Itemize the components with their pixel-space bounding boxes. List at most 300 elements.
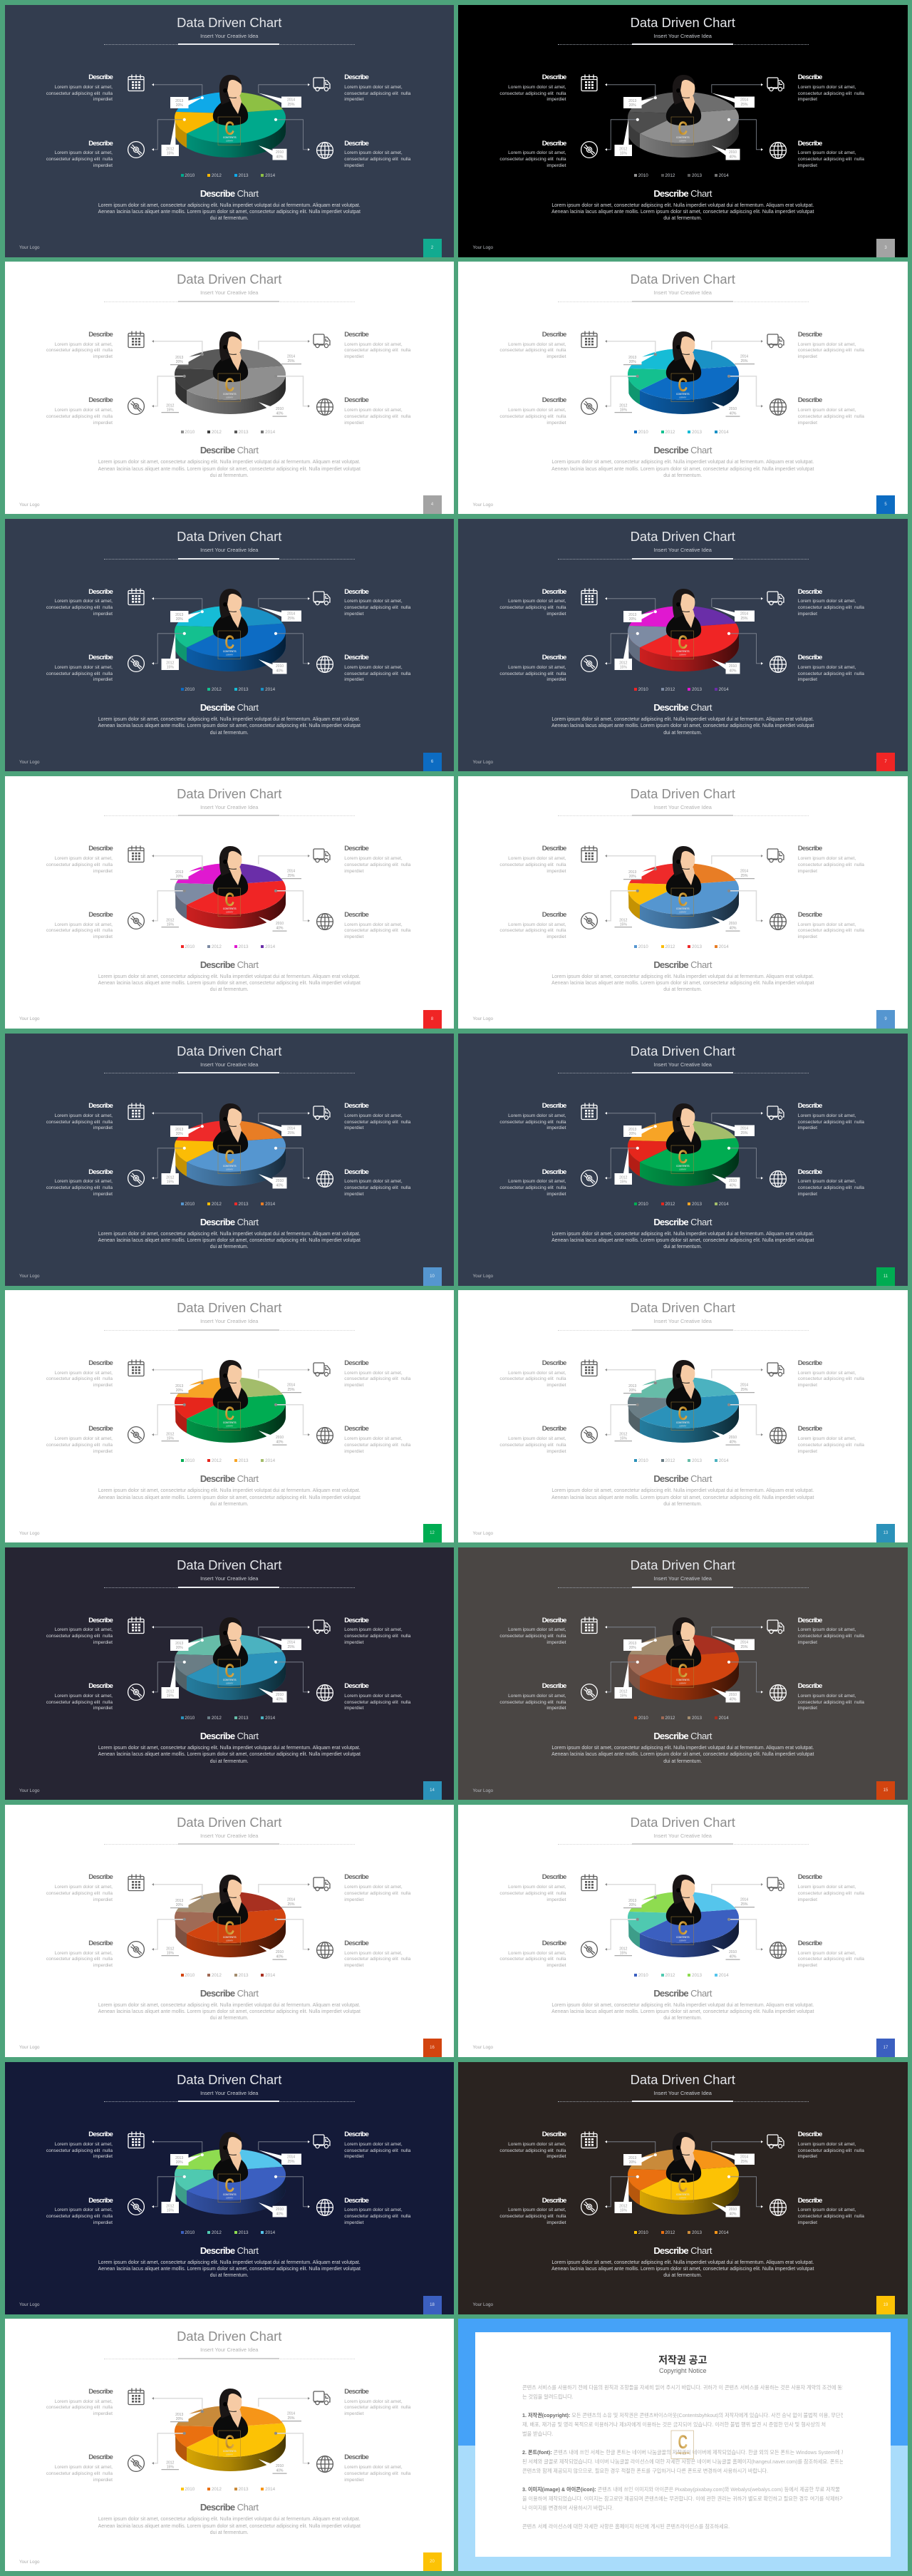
callout: bottom right: [344, 1682, 426, 1712]
chart: 3d pie with presenter: CONTENTS: [222, 650, 237, 653]
legend: 2010: [185, 1973, 195, 1978]
callout: top left: Describe: [88, 2388, 113, 2396]
callout: bottom left: Describe: [542, 396, 566, 404]
icon: truck: [767, 1619, 784, 1636]
chart: 3d pie with presenter: C: [678, 631, 688, 653]
chart: 3d pie with presenter: 2010: [729, 1693, 737, 1697]
chart: 3d pie with presenter: 25%: [287, 359, 295, 364]
chart: 3d pie with presenter: 20%: [175, 617, 183, 622]
icon: truck: [313, 1619, 330, 1636]
icon: disc: [581, 1426, 598, 1443]
callout: bottom left: Lorem ipsum dolor sit amet, consectetur adipiscing elit nulla imperdiet: [46, 2207, 113, 2225]
icon: truck: [767, 590, 784, 607]
icon: truck: [767, 77, 784, 91]
chart: 3d pie with presenter: 20%: [175, 103, 183, 108]
description: Lorem ipsum dolor sit amet, consectetur adipiscing elit. Nulla imperdiet volutpat dui at fermentum. Aliquam erat volutpat.: [98, 1746, 361, 1751]
callout: top left: Lorem ipsum dolor sit amet, consectetur adipiscing elit nulla imperdiet: [499, 1371, 566, 1388]
callout: top left: [499, 331, 566, 359]
legend: 2014: [265, 1716, 275, 1721]
callout: top right: Lorem ipsum dolor sit amet, consectetur adipiscing elit nulla imperdiet: [344, 1371, 410, 1388]
callout: top left: Describe: [542, 1102, 566, 1110]
chart: 3d pie with presenter: 2010: [729, 407, 737, 411]
description: dui at fermentum.: [210, 473, 249, 478]
chart: 3d pie with presenter: LIBRARY: [679, 1426, 687, 1428]
callout: top right: Describe: [798, 73, 822, 81]
notice body text: 을 이용하여 제작되었습니다. 이미지는 참고로만 제공되며 콘텐츠에는 무관합니다. 이에 관한 권리는 귀하가 별도로 확인하고 필요한 경우 여기를 삭제하거: [522, 2496, 843, 2502]
page number: 11: [884, 1274, 888, 1279]
callout: top right: [798, 1102, 880, 1132]
callout: top right: Describe: [344, 2131, 368, 2138]
legend: 2014: [265, 1973, 275, 1978]
chart: 3d pie with presenter: [151, 2386, 311, 2475]
title: Data Driven Chart: [631, 2071, 735, 2087]
icon: globe: [770, 656, 787, 673]
description: Describe Chart: [200, 188, 259, 198]
legend: 2014: [265, 944, 275, 949]
callout: top right: Describe: [344, 1359, 368, 1367]
callout: bottom left: [31, 1939, 113, 1969]
callout: top left: [31, 1873, 113, 1904]
description: Aenean lacinia lacus aliquet ante mollis. Lorem ipsum dolor sit amet, consectetur adipiscing elit. Nulla imperdiet volutpat: [551, 467, 814, 472]
legend: 2012: [665, 430, 675, 435]
chart: 3d pie with presenter: CONTENTS: [222, 907, 237, 910]
callout: top right: Describe: [798, 1873, 822, 1881]
chart: 3d pie with presenter: 2012: [166, 1947, 174, 1951]
description: Describe Chart: [200, 1988, 259, 1999]
callout: top right: Lorem ipsum dolor sit amet, consectetur adipiscing elit nulla imperdiet: [798, 342, 864, 359]
callout: top left: Describe: [542, 331, 566, 339]
callout: bottom left: [46, 140, 113, 168]
callout: top right: [344, 2388, 426, 2418]
description: dui at fermentum.: [663, 2273, 702, 2278]
chart: 3d pie with presenter: 2013: [628, 1899, 636, 1903]
description: dui at fermentum.: [663, 473, 702, 478]
callout: bottom right: Describe: [798, 1425, 822, 1433]
callout: bottom left: Lorem ipsum dolor sit amet, consectetur adipiscing elit nulla imperdiet: [499, 2207, 566, 2225]
description: Aenean lacinia lacus aliquet ante mollis. Lorem ipsum dolor sit amet, consectetur adipiscing elit. Nulla imperdiet volutpat: [551, 981, 814, 986]
chart: 3d pie with presenter: 25%: [740, 103, 748, 107]
chart: 3d pie with presenter: 20%: [629, 2160, 636, 2165]
chart: 3d pie with presenter: 2010: [729, 150, 737, 154]
icon: disc: [581, 1684, 598, 1701]
chart: 3d pie with presenter: 2010: [275, 1178, 284, 1183]
logo text: Your Logo: [473, 1788, 493, 1793]
callout: top left: Lorem ipsum dolor sit amet, consectetur adipiscing elit nulla imperdiet: [499, 1885, 566, 1902]
chart: 3d pie with presenter: 40%: [729, 1441, 737, 1445]
chart: 3d pie with presenter: 2013: [628, 2155, 636, 2160]
callout: top right: Describe: [798, 845, 822, 852]
chart: 3d pie with presenter: 2013: [628, 613, 636, 617]
chart: 3d pie with presenter: 2012: [166, 1175, 174, 1180]
chart: 3d pie with presenter: 2012: [166, 661, 174, 665]
subtitle: Insert Your Creative Idea: [200, 2090, 258, 2096]
callout: bottom left: Lorem ipsum dolor sit amet, consectetur adipiscing elit nulla imperdiet: [499, 1694, 566, 1711]
page number: 4: [431, 503, 433, 507]
subheading: Copyright Notice: [659, 2367, 707, 2374]
callout: top right: Lorem ipsum dolor sit amet, consectetur adipiscing elit nulla imperdiet: [798, 1627, 864, 1645]
page number: [876, 1267, 895, 1286]
description: [458, 1989, 908, 2022]
slide 9: white sky blue: [458, 776, 908, 1029]
callout: top right: [798, 1359, 880, 1389]
callout: bottom left: [484, 1425, 566, 1456]
icon: truck: [313, 77, 331, 91]
description: Aenean lacinia lacus aliquet ante mollis. Lorem ipsum dolor sit amet, consectetur adipiscing elit. Nulla imperdiet volutpat: [98, 2009, 361, 2014]
callout: top right: Lorem ipsum dolor sit amet, consectetur adipiscing elit nulla imperdiet: [344, 342, 410, 359]
callout: bottom right: [798, 140, 864, 168]
notice body text: 는 것임을 알려드립니다.: [522, 2394, 574, 2400]
callout: top left: Describe: [88, 587, 113, 596]
callout: bottom left: [484, 1168, 566, 1198]
title: Data Driven Chart: [177, 1044, 281, 1058]
description: [4, 703, 454, 736]
chart: 3d pie with presenter: CONTENTS: [222, 1165, 237, 1168]
callout: bottom left: Lorem ipsum dolor sit amet, consectetur adipiscing elit nulla imperdiet: [46, 1951, 113, 1968]
description: Aenean lacinia lacus aliquet ante mollis. Lorem ipsum dolor sit amet, consectetur adipiscing elit. Nulla imperdiet volutpat: [98, 2524, 361, 2529]
callout: top left: Lorem ipsum dolor sit amet, consectetur adipiscing elit nulla imperdiet: [499, 1113, 566, 1130]
notice body text: 콘텐츠와 함께 제공되지 않으므로, 필요한 경우 적절한 폰트를 구입하거나 다른 폰트로 변경하여 사용하시기 바랍니다.: [522, 2468, 768, 2474]
callout: bottom right: Describe: [798, 2197, 822, 2204]
callout: bottom right: Describe: [798, 1682, 822, 1690]
legend: 2010: [638, 687, 648, 692]
legend: 2010: [638, 944, 648, 949]
page number: [423, 2039, 442, 2057]
callout: top right: Lorem ipsum dolor sit amet, consectetur adipiscing elit nulla imperdiet: [344, 85, 410, 102]
icon: truck: [313, 2390, 330, 2407]
chart: 3d pie with presenter: LIBRARY: [226, 397, 233, 399]
legend: 2014: [719, 1716, 729, 1721]
callout: top left: Lorem ipsum dolor sit amet, consectetur adipiscing elit nulla imperdiet: [499, 2142, 566, 2159]
slide 18: midnight indigo: [4, 2061, 454, 2314]
chart: 3d pie with presenter: 25%: [740, 1388, 748, 1392]
page number: [876, 238, 895, 257]
legend: 2014: [265, 430, 275, 435]
callout: top left: [31, 1359, 113, 1389]
callout: top left: [484, 1359, 566, 1389]
description: Describe Chart: [653, 2245, 712, 2255]
page number: 17: [884, 2046, 888, 2050]
description: Lorem ipsum dolor sit amet, consectetur adipiscing elit. Nulla imperdiet volutpat dui at fermentum. Aliquam erat volutpat.: [551, 460, 814, 465]
logo text: Your Logo: [473, 1016, 493, 1021]
chart: 3d pie with presenter: C: [224, 117, 234, 138]
chart: 3d pie with presenter: CONTENTS: [222, 135, 237, 138]
chart: 3d pie with presenter: LIBRARY: [226, 654, 233, 656]
icon: disc: [127, 2455, 144, 2472]
callout: bottom right: [344, 396, 410, 426]
callout: top left: Describe: [542, 845, 566, 852]
legend: [181, 430, 275, 435]
chart: 3d pie with presenter: [604, 587, 765, 676]
chart: 3d pie with presenter: 2013: [175, 870, 183, 875]
notice body text: 콘텐츠 서비스를 사용하기 전에 다음의 원칙과 조항들을 자세히 읽어 주시기 바랍니다. 귀하가 이 콘텐츠 서비스를 사용하는 것은 사용자 계약의 조건에 동의하: [522, 2385, 843, 2391]
callout: top right: [344, 587, 426, 618]
chart: 3d pie with presenter: 2013: [628, 1127, 636, 1131]
chart: 3d pie with presenter: C: [224, 888, 234, 910]
chart: 3d pie with presenter: 2013: [175, 2413, 183, 2417]
chart: 3d pie with presenter: 2014: [286, 355, 295, 359]
description: Aenean lacinia lacus aliquet ante mollis. Lorem ipsum dolor sit amet, consectetur adipiscing elit. Nulla imperdiet volutpat: [98, 210, 361, 215]
callout: bottom left: Lorem ipsum dolor sit amet, consectetur adipiscing elit nulla imperdiet: [499, 1436, 566, 1454]
callout: top left: [46, 331, 113, 359]
logo text: Your Logo: [19, 2045, 39, 2050]
title: Data Driven Chart: [177, 2071, 281, 2087]
callout: bottom left: [484, 2197, 566, 2227]
subtitle: Insert Your Creative Idea: [200, 33, 258, 38]
description: Aenean lacinia lacus aliquet ante mollis. Lorem ipsum dolor sit amet, consectetur adipiscing elit. Nulla imperdiet volutpat: [551, 723, 814, 728]
callout: bottom right: Describe: [798, 396, 822, 404]
callout: bottom right: Lorem ipsum dolor sit amet, consectetur adipiscing elit nulla imperdiet: [798, 150, 864, 168]
chart: 3d pie with presenter: 25%: [287, 874, 295, 878]
legend: 2014: [719, 944, 729, 949]
chart: 3d pie with presenter: 2014: [286, 2155, 295, 2159]
chart: 3d pie with presenter: 2014: [740, 1384, 748, 1388]
chart: 3d pie with presenter: 15%: [166, 1694, 174, 1698]
logo: C badge watermark: CONTENTS: [676, 2452, 690, 2455]
page number: 5: [884, 503, 887, 507]
slide 15: warm grey rust: [458, 1547, 908, 1800]
chart: 3d pie with presenter: 2014: [740, 2155, 748, 2159]
chart: 3d pie with presenter: 25%: [740, 1645, 748, 1649]
description: Describe Chart: [653, 959, 712, 970]
chart: 3d pie with presenter: 2014: [740, 98, 748, 102]
callout: bottom right: [798, 911, 880, 941]
legend: [181, 1202, 288, 1207]
legend: 2014: [719, 2230, 729, 2235]
callout: top left: Lorem ipsum dolor sit amet, consectetur adipiscing elit nulla imperdiet: [46, 1371, 113, 1388]
callout: top left: [31, 1617, 113, 1647]
chart: 3d pie with presenter: CONTENTS: [676, 1936, 690, 1939]
legend: 2010: [638, 1973, 648, 1978]
chart: 3d pie with presenter: 2013: [175, 356, 183, 360]
callout: top right: Lorem ipsum dolor sit amet, consectetur adipiscing elit nulla imperdiet: [798, 2142, 864, 2159]
title: Data Driven Chart: [631, 786, 735, 801]
chart: 3d pie with presenter: 2012: [619, 1175, 628, 1180]
callout: bottom left: Describe: [542, 1939, 566, 1947]
chart: 3d pie with presenter: 2010: [275, 922, 284, 926]
description: [458, 1474, 908, 1508]
legend: 2014: [265, 1458, 275, 1463]
callout: top right: Describe: [798, 1102, 822, 1110]
chart: 3d pie with presenter: 20%: [629, 1389, 636, 1393]
chart: 3d pie with presenter: CONTENTS: [222, 1936, 237, 1939]
callout: top left: [484, 1617, 566, 1647]
chart: 3d pie with presenter: 40%: [729, 926, 737, 930]
chart: 3d pie with presenter: 2010: [275, 1693, 284, 1697]
logo text: Your Logo: [473, 760, 493, 764]
callout: bottom right: Lorem ipsum dolor sit amet, consectetur adipiscing elit nulla imperdiet: [344, 1436, 410, 1454]
heading: copyright notice: 저작권 공고: [658, 2354, 707, 2366]
notice body text: 나 이미지를 변경하여 사용하시기 바랍니다.: [522, 2505, 613, 2511]
description: Describe Chart: [653, 188, 712, 198]
chart: 3d pie with presenter: LIBRARY: [679, 2197, 687, 2199]
callout: top left: Lorem ipsum dolor sit amet, consectetur adipiscing elit nulla imperdiet: [46, 2142, 113, 2159]
callout: top right: Lorem ipsum dolor sit amet, consectetur adipiscing elit nulla imperdiet: [344, 1627, 410, 1645]
callout: top right: [344, 73, 410, 102]
callout: top right: [344, 2131, 426, 2160]
chart: 3d pie with presenter: [151, 587, 311, 676]
callout: top right: [344, 1617, 426, 1647]
callout: top left: [484, 1873, 566, 1904]
callout: bottom left: [31, 2453, 113, 2484]
description: [98, 188, 361, 221]
callout: top right: Lorem ipsum dolor sit amet, consectetur adipiscing elit nulla imperdiet: [344, 1113, 410, 1130]
chart: 3d pie with presenter: CONTENTS: [222, 1679, 237, 1681]
chart: 3d pie with presenter: 25%: [740, 359, 748, 364]
description: Describe Chart: [200, 1473, 259, 1484]
icon: disc: [581, 1169, 598, 1186]
chart: 3d pie with presenter: C: [678, 2174, 688, 2195]
callout: top right: Lorem ipsum dolor sit amet, consectetur adipiscing elit nulla imperdiet: [344, 856, 410, 874]
callout: bottom right: [344, 654, 426, 684]
legend: 2014: [265, 2487, 275, 2492]
icon: truck: [767, 1876, 784, 1893]
chart: 3d pie with presenter: 15%: [620, 922, 627, 927]
description: dui at fermentum.: [210, 2016, 249, 2021]
page number: [876, 1524, 895, 1542]
description: Describe Chart: [653, 1216, 712, 1227]
chart: 3d pie with presenter: 2014: [286, 98, 295, 102]
page number: 2: [431, 245, 433, 249]
callout: top left: [31, 1102, 113, 1132]
chart: 3d pie with presenter: 25%: [740, 1130, 748, 1135]
callout: bottom right: Lorem ipsum dolor sit amet, consectetur adipiscing elit nulla imperdiet: [344, 1694, 410, 1711]
logo text: Your Logo: [473, 2302, 493, 2307]
chart: 3d pie with presenter: LIBRARY: [679, 140, 687, 142]
icon: truck: [767, 1105, 784, 1122]
description: Aenean lacinia lacus aliquet ante mollis. Lorem ipsum dolor sit amet, consectetur adipiscing elit. Nulla imperdiet volutpat: [551, 2267, 814, 2272]
callout: top right: Describe: [798, 2131, 822, 2138]
chart: 3d pie with presenter: 40%: [276, 1697, 284, 1701]
description: dui at fermentum.: [210, 2530, 249, 2535]
subtitle: Insert Your Creative Idea: [654, 804, 712, 810]
chart: 3d pie with presenter: 40%: [729, 669, 737, 673]
chart: 3d pie with presenter: LIBRARY: [679, 1939, 687, 1942]
callout: top right: Lorem ipsum dolor sit amet, consectetur adipiscing elit nulla imperdiet: [344, 2142, 410, 2159]
description: [458, 960, 908, 994]
legend: 2013: [692, 172, 702, 178]
chart: 3d pie with presenter: LIBRARY: [226, 2454, 233, 2456]
chart: 3d pie with presenter: C: [678, 1659, 688, 1681]
page number: [423, 1781, 442, 1800]
chart: 3d pie with presenter: [151, 2130, 311, 2218]
chart: 3d pie with presenter: 2012: [166, 918, 174, 922]
chart: 3d pie with presenter: 40%: [729, 2212, 737, 2216]
legend: [181, 1716, 288, 1721]
callout: bottom left: [484, 911, 566, 941]
chart: 3d pie with presenter: CONTENTS: [676, 135, 690, 138]
title: Data Driven Chart: [631, 1044, 735, 1058]
legend: 2014: [265, 172, 275, 178]
legend: 2013: [692, 1202, 702, 1206]
chart: 3d pie with presenter: [604, 1615, 765, 1704]
icon: calendar: [127, 1359, 144, 1376]
chart: 3d pie with presenter: 20%: [629, 617, 636, 622]
logo text: Your Logo: [19, 503, 39, 508]
chart: 3d pie with presenter: LIBRARY: [226, 1682, 233, 1685]
chart: 3d pie with presenter: 40%: [276, 2212, 284, 2216]
icon: disc: [127, 2198, 144, 2215]
legend: 2013: [692, 1716, 702, 1721]
callout: bottom left: Lorem ipsum dolor sit amet, consectetur adipiscing elit nulla imperdiet: [499, 408, 566, 426]
page number: [876, 2039, 895, 2057]
subtitle: Insert Your Creative Idea: [200, 1061, 258, 1068]
legend: [181, 1458, 288, 1464]
callout: top left: Describe: [542, 73, 566, 81]
callout: top left: [31, 2388, 113, 2418]
chart: 3d pie with presenter: C: [224, 631, 234, 653]
title: Data Driven Chart: [177, 14, 281, 30]
chart: 3d pie with presenter: 20%: [175, 1903, 183, 1907]
callout: top right: Lorem ipsum dolor sit amet, consectetur adipiscing elit nulla imperdiet: [798, 1371, 864, 1388]
legend: [181, 1973, 288, 1979]
description: Describe Chart: [200, 702, 259, 713]
title: Data Driven Chart: [177, 786, 281, 801]
callout: top left: Lorem ipsum dolor sit amet, consectetur adipiscing elit nulla imperdiet: [46, 342, 113, 359]
chart: 3d pie with presenter: 2013: [175, 1642, 183, 1646]
page number: [423, 238, 442, 257]
slide 12: white green: [4, 1290, 454, 1542]
legend: [181, 2230, 288, 2235]
logo text: Your Logo: [19, 1274, 39, 1279]
description: [4, 1474, 454, 1508]
subtitle: Insert Your Creative Idea: [200, 547, 258, 553]
description: Lorem ipsum dolor sit amet, consectetur adipiscing elit. Nulla imperdiet volutpat dui at fermentum. Aliquam erat volutpat.: [98, 1488, 361, 1493]
icon: disc: [581, 2198, 598, 2215]
page number: 3: [884, 245, 887, 249]
page number: [876, 495, 895, 514]
legend: 2012: [212, 1973, 222, 1978]
logo text: Your Logo: [19, 2560, 39, 2565]
callout: bottom left: Lorem ipsum dolor sit amet, consectetur adipiscing elit nulla imperdiet: [46, 665, 113, 682]
description: Aenean lacinia lacus aliquet ante mollis. Lorem ipsum dolor sit amet, consectetur adipiscing elit. Nulla imperdiet volutpat: [98, 2267, 361, 2272]
chart: 3d pie with presenter: 2010: [275, 2207, 284, 2211]
callout: top left: Describe: [542, 1617, 566, 1624]
legend: 2010: [185, 944, 195, 949]
page number: 7: [884, 760, 887, 764]
chart: 3d pie with presenter: 2013: [628, 356, 636, 360]
legend: 2012: [212, 687, 222, 692]
description: Lorem ipsum dolor sit amet, consectetur adipiscing elit. Nulla imperdiet volutpat dui at fermentum. Aliquam erat volutpat.: [551, 2003, 814, 2008]
legend: 2012: [212, 430, 222, 435]
chart: 3d pie with presenter: 2014: [286, 1897, 295, 1902]
chart: 3d pie with presenter: 25%: [287, 1388, 295, 1392]
chart: 3d pie with presenter: 2013: [175, 613, 183, 617]
chart: 3d pie with presenter: C: [678, 374, 688, 396]
icon: calendar: [127, 845, 144, 862]
icon: truck: [313, 1105, 330, 1122]
legend: 2013: [238, 1973, 248, 1978]
legend: 2013: [692, 687, 702, 692]
icon: globe: [316, 398, 333, 416]
description: [4, 1731, 454, 1765]
callout: top left: [31, 587, 113, 618]
callout: top right: Describe: [344, 2388, 368, 2396]
legend: 2013: [238, 430, 248, 435]
notice body text: 콘텐츠 서체 라이선스에 대한 자세한 사항은 홈페이지 하단에 게시된 콘텐츠라이선스를 참조하세요.: [522, 2524, 730, 2530]
description: Lorem ipsum dolor sit amet, consectetur adipiscing elit. Nulla imperdiet volutpat dui at fermentum. Aliquam erat volutpat.: [98, 1232, 361, 1237]
chart: 3d pie with presenter: C: [224, 2174, 234, 2195]
description: Describe Chart: [653, 1473, 712, 1484]
chart: 3d pie with presenter: 20%: [175, 1646, 183, 1650]
callout: top left: Lorem ipsum dolor sit amet, consectetur adipiscing elit nulla imperdiet: [46, 85, 113, 102]
logo: C badge watermark: C: [678, 2431, 688, 2453]
icon: disc: [581, 912, 598, 929]
icon: globe: [770, 1170, 787, 1187]
icon: globe: [770, 913, 787, 930]
chart: 3d pie with presenter: [604, 329, 765, 418]
chart: 3d pie with presenter: 15%: [166, 922, 174, 927]
description: Aenean lacinia lacus aliquet ante mollis. Lorem ipsum dolor sit amet, consectetur adipiscing elit. Nulla imperdiet volutpat: [98, 467, 361, 472]
